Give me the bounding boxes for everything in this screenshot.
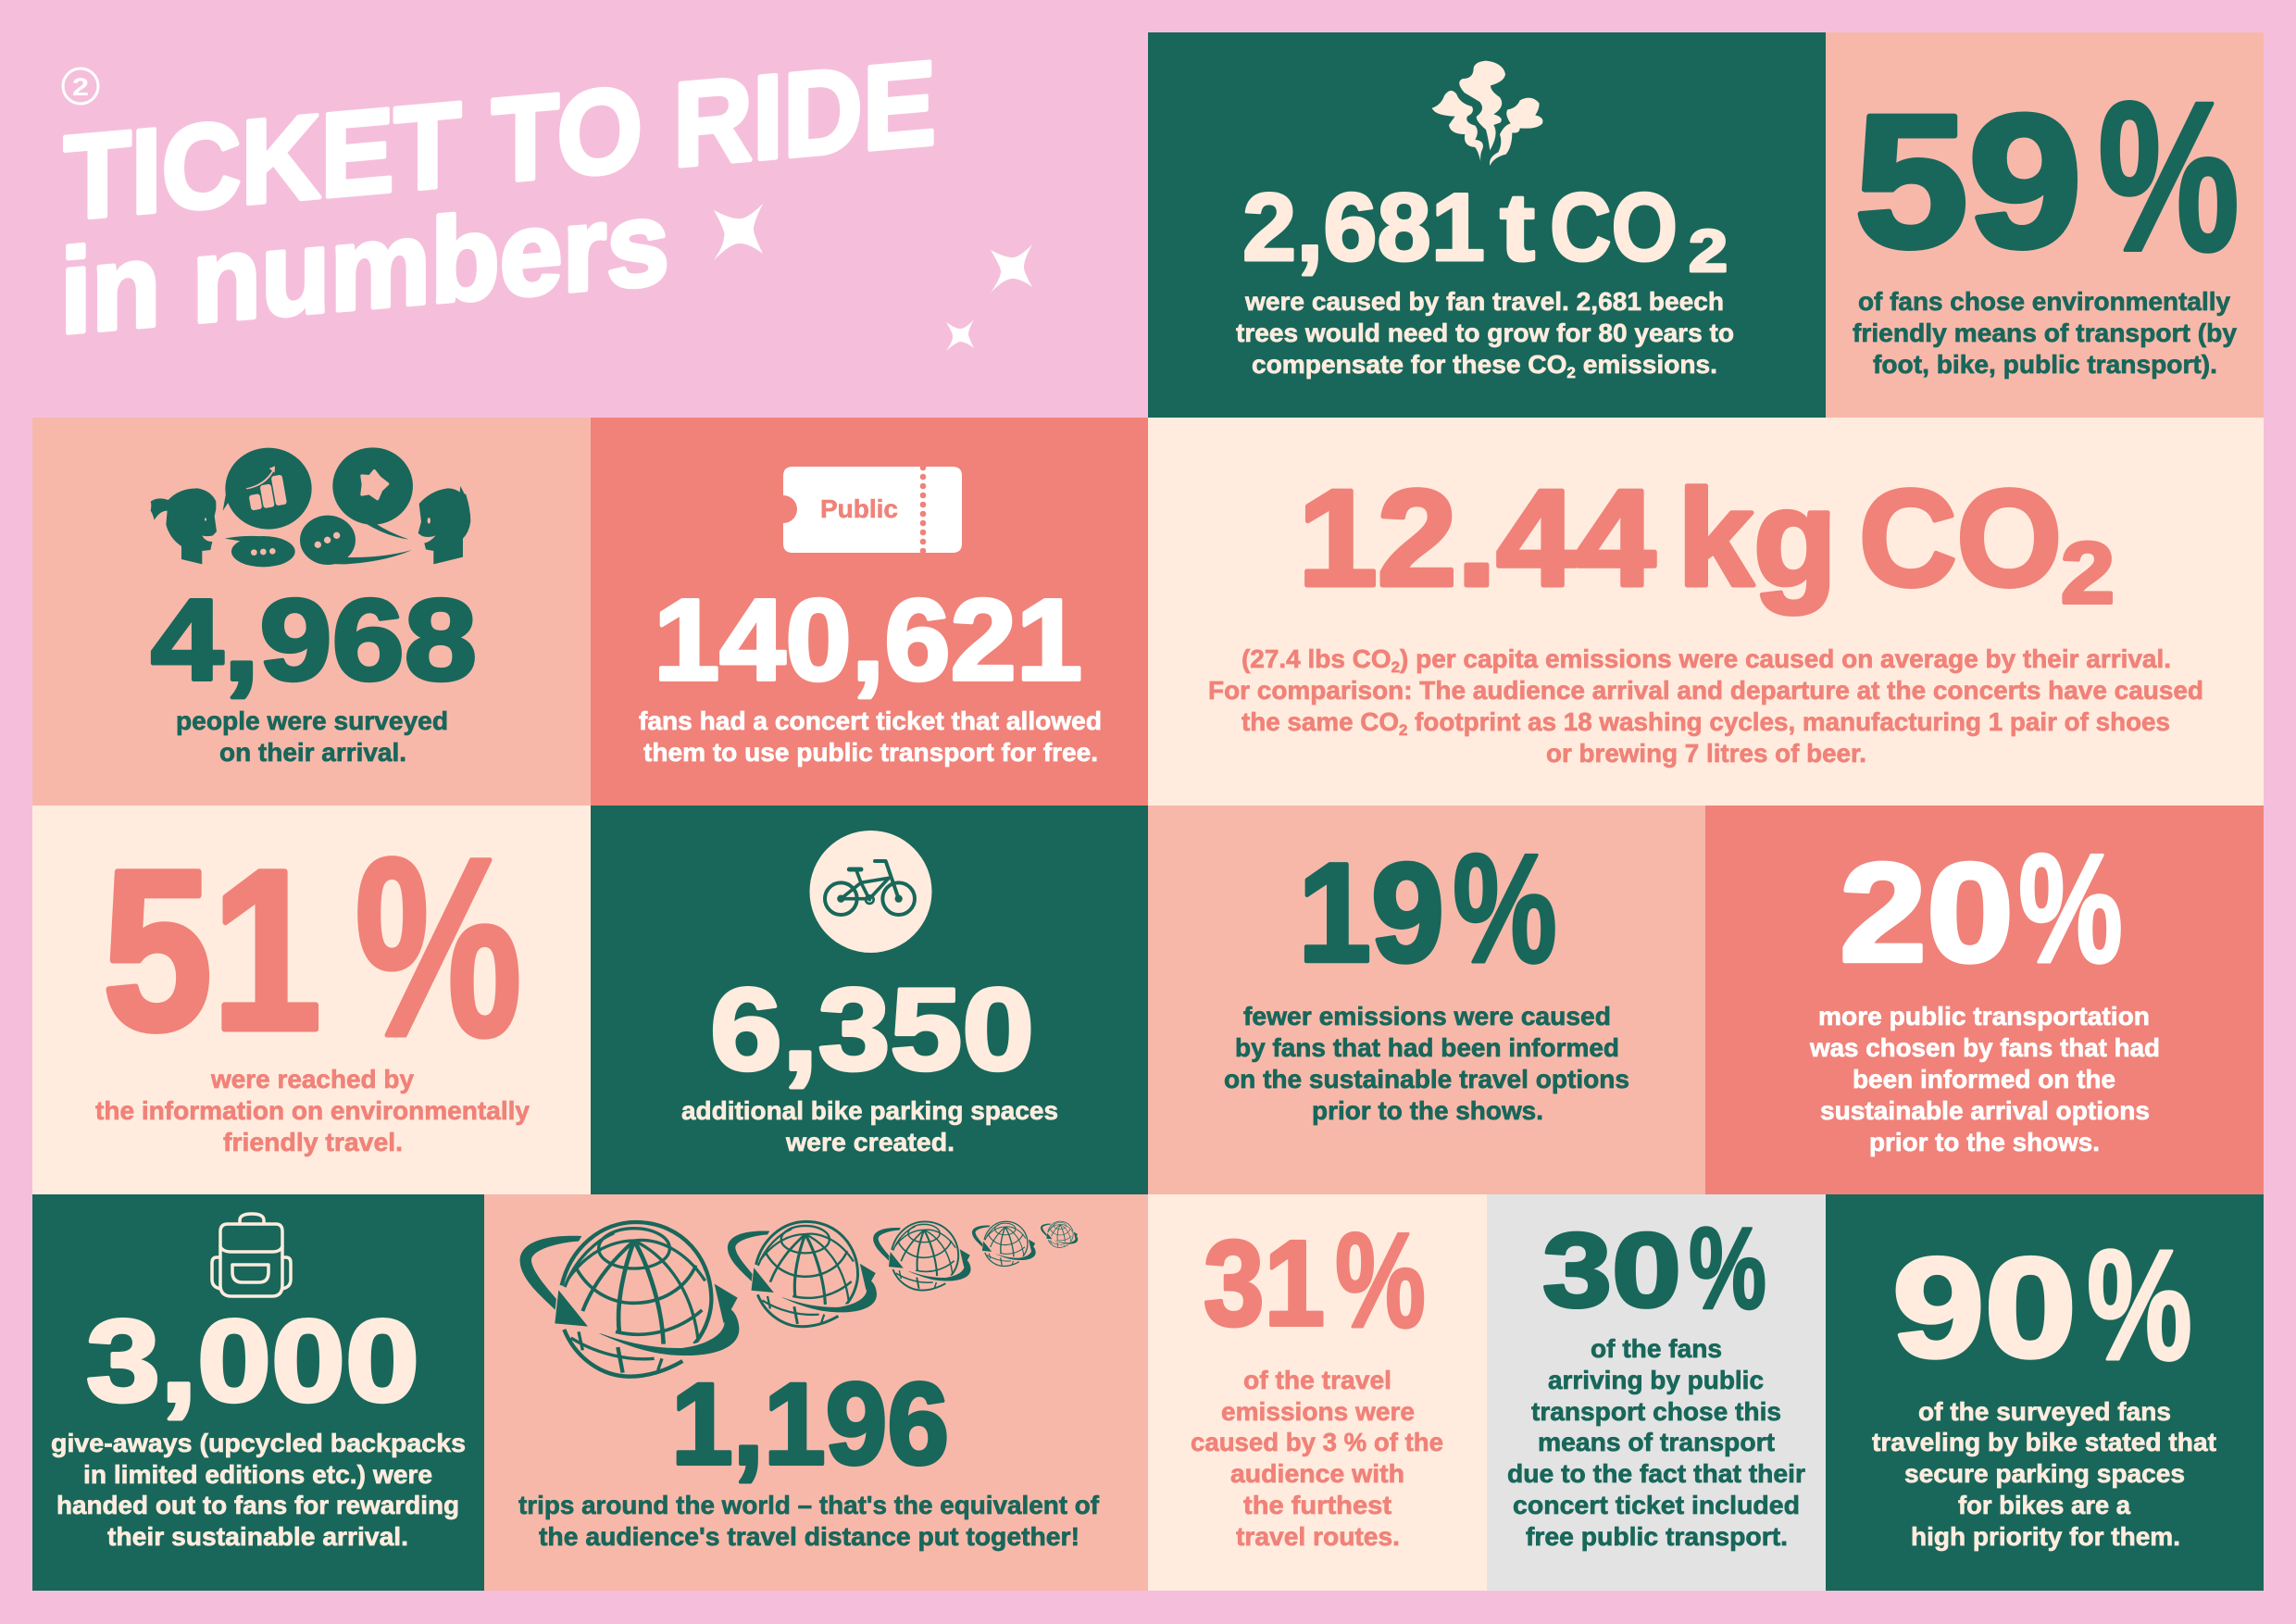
panel: give-aways: [32, 1194, 484, 1591]
panel: 59 percent: [1826, 32, 2264, 418]
number: 1,196: 1,196: [671, 1360, 949, 1489]
number: 2,681 t CO2: CO: [1550, 174, 1678, 281]
title: [60, 36, 936, 359]
text: 19 percent description: [1224, 1002, 1629, 1125]
text: per capita description: ) per capita emissions were caused on average by their arrival.: [1400, 644, 2171, 673]
number: 20%: %: [2018, 821, 2123, 995]
text: 30 percent description: of the fans: [1591, 1334, 1722, 1363]
number: 19%: 19: [1298, 834, 1444, 992]
text: 51 percent description: friendly travel.: [223, 1128, 403, 1156]
text: 31 percent description: the furthest: [1243, 1491, 1391, 1519]
text: 31 percent description: travel routes.: [1236, 1522, 1400, 1551]
text: 30 percent description: concert ticket included: [1513, 1491, 1800, 1519]
text: ticket description: [639, 706, 1102, 767]
text: 59 percent description: of fans chose environmentally: [1858, 287, 2230, 316]
number: 19%: [1298, 821, 1557, 995]
text: 59 percent description: foot, bike, public transport).: [1873, 350, 2217, 379]
number: 51%: 51: [103, 823, 321, 1078]
text: 59 percent description: [1853, 287, 2237, 379]
text: give-aways description: [51, 1429, 466, 1551]
text: 30 percent description: transport chose this: [1531, 1397, 1781, 1426]
text: bike parking description: additional bike parking spaces: [681, 1096, 1058, 1125]
number: 90%: %: [2087, 1218, 2192, 1393]
icon: people talking with speech bubbles: [151, 447, 470, 567]
text: give-aways description: handed out to fans for rewarding: [56, 1491, 459, 1519]
icon: circled number 2: [63, 69, 98, 104]
icon: backpack: [212, 1214, 291, 1296]
panel: 51 percent: [32, 806, 591, 1194]
number: 31%: 31: [1204, 1215, 1325, 1351]
title: TICKET TO RIDE: [64, 36, 936, 245]
icon: bicycle in circle: [809, 831, 931, 953]
text: trips description: [518, 1491, 1100, 1551]
text: 20 percent description: more public transportation: [1818, 1002, 2150, 1031]
panel: 19 percent: [1148, 806, 1705, 1194]
number: 3,000: 3,000: [86, 1295, 419, 1426]
text: give-aways description: give-aways (upcycled backpacks: [51, 1429, 466, 1457]
text: 31 percent description: emissions were: [1221, 1397, 1415, 1426]
text: fan travel description: [1236, 287, 1734, 381]
panel: per capita emissions: [1148, 418, 2264, 806]
text: per capita description: footprint as 18 washing cycles, manufacturing 1 pair of shoes: [1407, 707, 2170, 736]
number: 20%: [1840, 821, 2123, 995]
number: 12.44 kg CO2: [1298, 462, 2115, 621]
number: 51%: %: [355, 806, 522, 1090]
number: 31%: [1204, 1205, 1426, 1355]
text: trips description: the audience's travel distance put together!: [539, 1522, 1079, 1551]
text: 19 percent description: on the sustainable travel options: [1224, 1065, 1629, 1093]
text: 51 percent description: the information on environmentally: [95, 1096, 530, 1125]
text: 19 percent description: by fans that had been informed: [1235, 1033, 1619, 1062]
text: 51 percent description: [95, 1065, 530, 1156]
icon: sparkle small: [946, 319, 974, 351]
text: fan travel description: emissions.: [1576, 350, 1717, 379]
number: 30%: %: [1689, 1205, 1766, 1333]
header: title area: [60, 36, 1032, 359]
number: 2,681 t CO2: 2,681: [1242, 174, 1485, 281]
text: per capita description: For comparison: The audience arrival and departure at the concerts have caused: [1208, 676, 2203, 705]
text: 90 percent description: for bikes are a: [1958, 1491, 2130, 1519]
text: 30 percent description: means of transport: [1538, 1428, 1775, 1456]
icon: smoke: [1432, 61, 1542, 166]
text: bike parking description: [681, 1096, 1058, 1156]
text: 30 percent description: arriving by public: [1548, 1366, 1764, 1394]
number: 6,350: 6,350: [710, 964, 1034, 1094]
text: per capita description: 2: [1399, 721, 1407, 739]
text: 31 percent description: caused by 3 % of the: [1191, 1428, 1443, 1456]
text: fan travel description: 2: [1566, 364, 1576, 381]
text: ticket description: them to use public transport for free.: [643, 738, 1098, 767]
icon: ticket: [783, 465, 962, 554]
number: 12.44 kg CO2: 2: [2061, 524, 2115, 621]
icon: ticket: Public: [820, 494, 898, 523]
number: 12.44 kg CO2: 12.44: [1298, 462, 1655, 615]
text: 90 percent description: traveling by bike stated that: [1872, 1428, 2216, 1456]
text: 90 percent description: [1872, 1397, 2216, 1551]
text: 20 percent description: was chosen by fans that had: [1809, 1033, 2160, 1062]
text: 51 percent description: were reached by: [210, 1065, 414, 1093]
text: per capita description: 2: [1391, 658, 1400, 676]
panel: 30 percent: [1487, 1194, 1826, 1591]
text: 30 percent description: [1507, 1334, 1805, 1551]
text: 31 percent description: of the travel: [1243, 1366, 1391, 1394]
number: 4,968: 4,968: [151, 576, 477, 705]
number: 12.44 kg CO2: kg: [1678, 462, 1837, 615]
number: 30%: [1542, 1205, 1766, 1333]
icon: sparkle medium: [991, 244, 1032, 293]
number: 2,681 t CO2: 2: [1689, 218, 1728, 284]
number: 20%: 20: [1840, 834, 2014, 992]
text: per capita description: or brewing 7 litres of beer.: [1546, 739, 1866, 768]
text: fan travel description: were caused by fan travel. 2,681 beech: [1244, 287, 1724, 316]
number: 19%: %: [1453, 821, 1557, 995]
number: 31%: %: [1335, 1205, 1426, 1355]
number: 59%: %: [2098, 57, 2240, 295]
number: 90%: [1892, 1218, 2192, 1393]
text: bike parking description: were created.: [785, 1128, 955, 1156]
text: surveyed description: people were surveyed: [176, 706, 448, 735]
panel: fan travel CO2: [1148, 32, 1826, 418]
text: 90 percent description: of the surveyed fans: [1918, 1397, 2171, 1426]
number: 30%: 30: [1542, 1212, 1681, 1330]
panel: public transport tickets: [591, 418, 1148, 806]
icon: row of globes: [520, 1221, 1078, 1377]
number: 140,621: 140,621: [654, 576, 1082, 705]
number: 2,681 t CO2: [1242, 174, 1728, 284]
text: 19 percent description: prior to the shows.: [1312, 1096, 1543, 1125]
title: in numbers: [60, 176, 669, 359]
text: 20 percent description: been informed on the: [1853, 1065, 2115, 1093]
number: 90%: 90: [1892, 1229, 2077, 1387]
text: 30 percent description: due to the fact that their: [1507, 1459, 1805, 1488]
icon: sparkle large: [714, 204, 763, 260]
text: 31 percent description: [1191, 1366, 1443, 1551]
panel: 90 percent: [1826, 1194, 2264, 1591]
number: 51%: [103, 806, 522, 1090]
panel: bike parking: [591, 806, 1148, 1194]
number: 59%: 59: [1854, 76, 2082, 287]
text: give-aways description: their sustainable arrival.: [107, 1522, 408, 1551]
text: 20 percent description: prior to the shows.: [1869, 1128, 2100, 1156]
text: surveyed description: on their arrival.: [219, 738, 406, 767]
number: 2,681 t CO2: t: [1500, 174, 1535, 281]
text: 30 percent description: free public transport.: [1526, 1522, 1788, 1551]
text: fan travel description: compensate for these CO: [1252, 350, 1566, 379]
text: surveyed description: [176, 706, 448, 767]
text: ticket description: fans had a concert ticket that allowed: [639, 706, 1102, 735]
text: 90 percent description: high priority for them.: [1911, 1522, 2180, 1551]
text: 20 percent description: [1809, 1002, 2160, 1156]
panel: surveyed people: [32, 418, 591, 806]
text: per capita description: the same CO: [1242, 707, 1400, 736]
text: 31 percent description: audience with: [1230, 1459, 1404, 1488]
text: trips description: trips around the world – that's the equivalent of: [518, 1491, 1100, 1519]
text: fan travel description: trees would need to grow for 80 years to: [1236, 319, 1734, 347]
panel: 31 percent: [1148, 1194, 1487, 1591]
number: 12.44 kg CO2: CO: [1859, 462, 2062, 615]
text: 20 percent description: sustainable arrival options: [1820, 1096, 2150, 1125]
text: per capita description: [1208, 644, 2203, 768]
panel: 20 percent: [1705, 806, 2264, 1194]
text: 90 percent description: secure parking spaces: [1904, 1459, 2185, 1488]
number: 59%: [1854, 57, 2240, 295]
text: 59 percent description: friendly means of transport (by: [1853, 319, 2237, 347]
text: 19 percent description: fewer emissions were caused: [1243, 1002, 1611, 1031]
panel: trips around the world: [484, 1194, 1148, 1591]
text: give-aways description: in limited editions etc.) were: [83, 1460, 432, 1489]
icon: circled number 2: 2: [72, 73, 89, 101]
text: per capita description: (27.4 lbs CO: [1242, 644, 1391, 673]
